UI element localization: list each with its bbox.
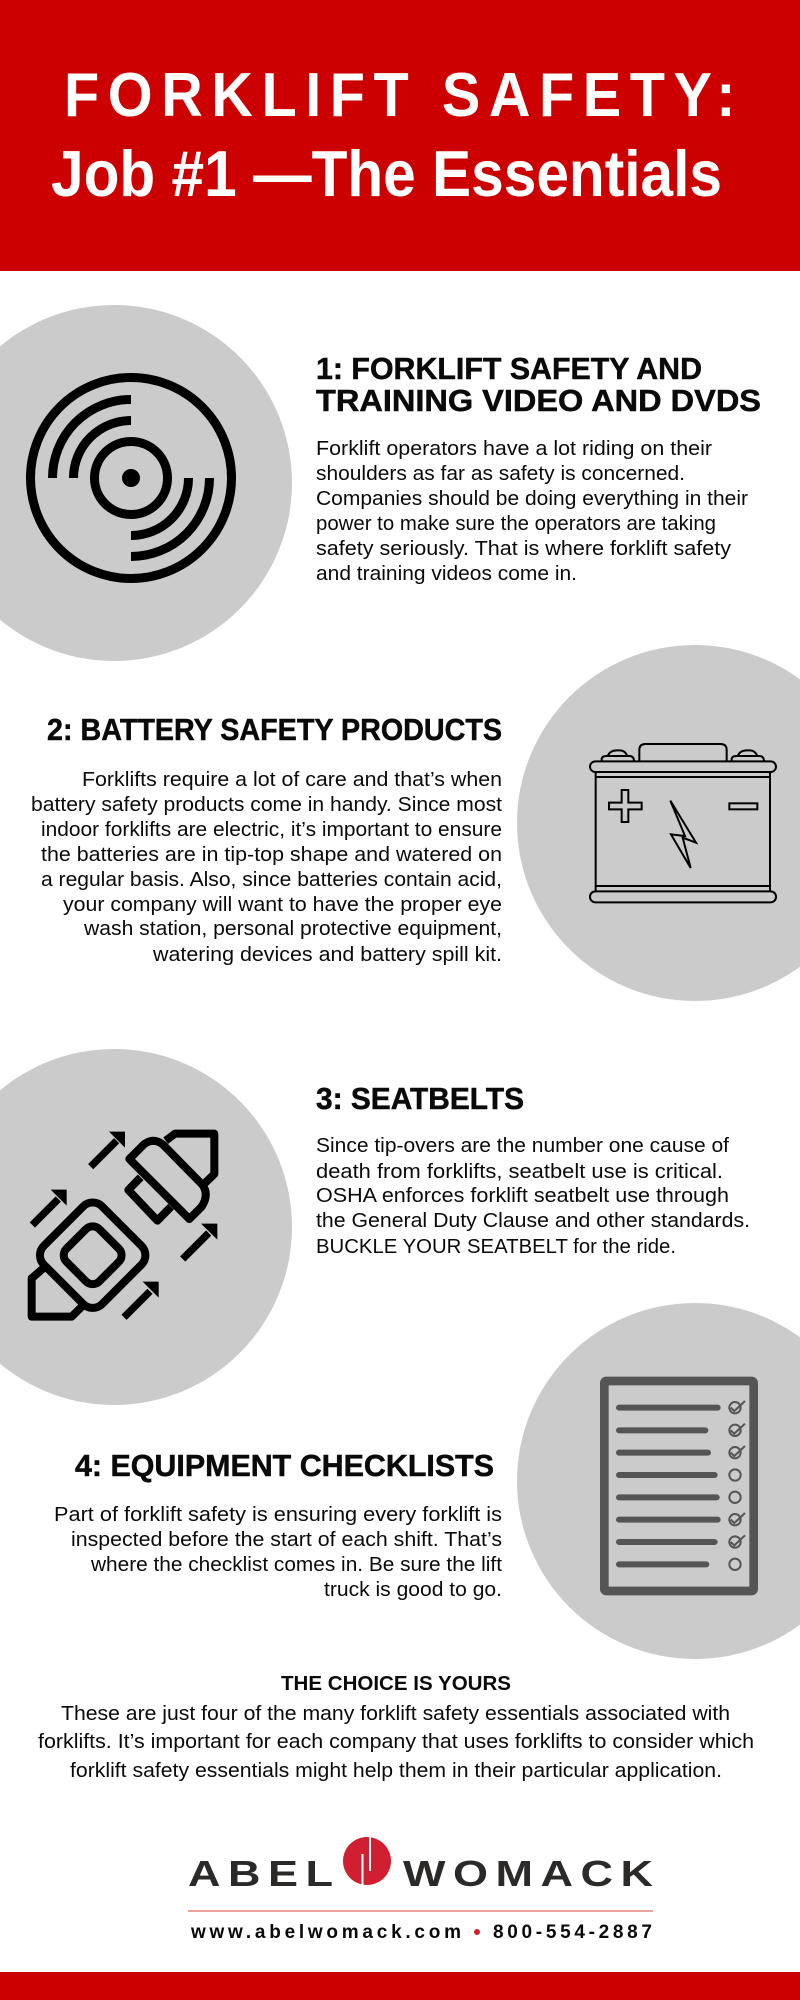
closing heading: THE CHOICE IS YOURS <box>281 1673 511 1695</box>
icon: seatbelt buckle <box>32 1132 217 1317</box>
closing text <box>38 1703 754 1782</box>
logo: Abel Womack <box>188 1837 654 1894</box>
body text 3: Since tip-overs are the number one cause of <box>316 1135 729 1157</box>
body text 3: death from forklifts, seatbelt use is critical. <box>316 1161 723 1183</box>
body text 3 <box>316 1135 750 1258</box>
panel: section 4 equipment checklists <box>54 1303 800 1659</box>
body text 2: watering devices and battery spill kit. <box>152 944 502 966</box>
panel: section 3 seatbelts <box>0 1049 750 1405</box>
contact line <box>190 1922 652 1943</box>
body text 4 <box>54 1504 502 1601</box>
body text 1: Forklift operators have a lot riding on their <box>316 438 712 460</box>
footer bar <box>0 1972 800 2000</box>
icon: battery <box>590 744 776 902</box>
heading 2: 2: BATTERY SAFETY PRODUCTS <box>47 712 502 747</box>
body text 2: wash station, personal protective equipment, <box>83 918 502 940</box>
icon: disc <box>30 378 232 578</box>
body text 2: the batteries are in tip-top shape and watered on <box>41 844 502 866</box>
title line 2: Job #1 —The Essentials <box>51 137 722 210</box>
body text 1: Companies should be doing everything in their <box>316 488 748 510</box>
body text 4: where the checklist comes in. Be sure the lift <box>90 1554 502 1576</box>
body text 1: shoulders as far as safety is concerned. <box>316 463 685 485</box>
circle background 4 <box>517 1303 800 1659</box>
panel: section 1 training videos <box>0 305 761 661</box>
closing text: forklift safety essentials might help them in their particular application. <box>70 1760 722 1782</box>
heading 1: 1: FORKLIFT SAFETY AND <box>316 351 702 386</box>
body text 1: and training videos come in. <box>316 563 577 585</box>
circle background 1 <box>0 305 292 661</box>
body text 3: the General Duty Clause and other standards. <box>316 1210 750 1232</box>
title line 1: FORKLIFT SAFETY: <box>64 60 735 129</box>
body text 2: indoor forklifts are electric, it’s important to ensure <box>41 819 502 841</box>
contact line: 800-554-2887 <box>493 1922 652 1943</box>
heading 1 <box>316 351 761 418</box>
body text 2: battery safety products come in handy. Since most <box>31 794 502 816</box>
panel: section 2 battery safety <box>31 645 800 1001</box>
logo: Abel Womack: WOMACK <box>403 1853 654 1894</box>
circle background 2 <box>517 645 800 1001</box>
body text 2: a regular basis. Also, since batteries contain acid, <box>41 869 502 891</box>
logo: Abel Womack: ABEL <box>188 1853 333 1894</box>
body text 3: BUCKLE YOUR SEATBELT for the ride. <box>316 1236 676 1258</box>
body text 3: OSHA enforces forklift seatbelt use through <box>316 1185 729 1207</box>
body text 4: Part of forklift safety is ensuring every forklift is <box>54 1504 502 1526</box>
heading 1: TRAINING VIDEO AND DVDS <box>316 383 761 418</box>
body text 2: Forklifts require a lot of care and that’s when <box>82 769 502 791</box>
icon: red logo circle <box>343 1837 391 1885</box>
header banner with title <box>0 0 800 271</box>
heading 3: 3: SEATBELTS <box>316 1081 524 1116</box>
body text 4: inspected before the start of each shift. That’s <box>71 1529 502 1551</box>
body text 1: safety seriously. That is where forklift safety <box>316 538 731 560</box>
contact line: www.abelwomack.com <box>190 1922 461 1943</box>
body text 2 <box>31 769 502 966</box>
closing text: These are just four of the many forklift safety essentials associated with <box>61 1703 730 1725</box>
icon: checklist <box>604 1381 754 1591</box>
body text 4: truck is good to go. <box>324 1579 502 1601</box>
heading 4: 4: EQUIPMENT CHECKLISTS <box>75 1448 494 1483</box>
body text 1: power to make sure the operators are taking <box>316 513 716 535</box>
body text 2: your company will want to have the proper eye <box>63 894 502 916</box>
circle background 3 <box>0 1049 292 1405</box>
panel: the choice is yours <box>38 1673 754 1782</box>
body text 1 <box>316 438 748 585</box>
closing text: forklifts. It’s important for each company that uses forklifts to consider which <box>38 1731 754 1753</box>
